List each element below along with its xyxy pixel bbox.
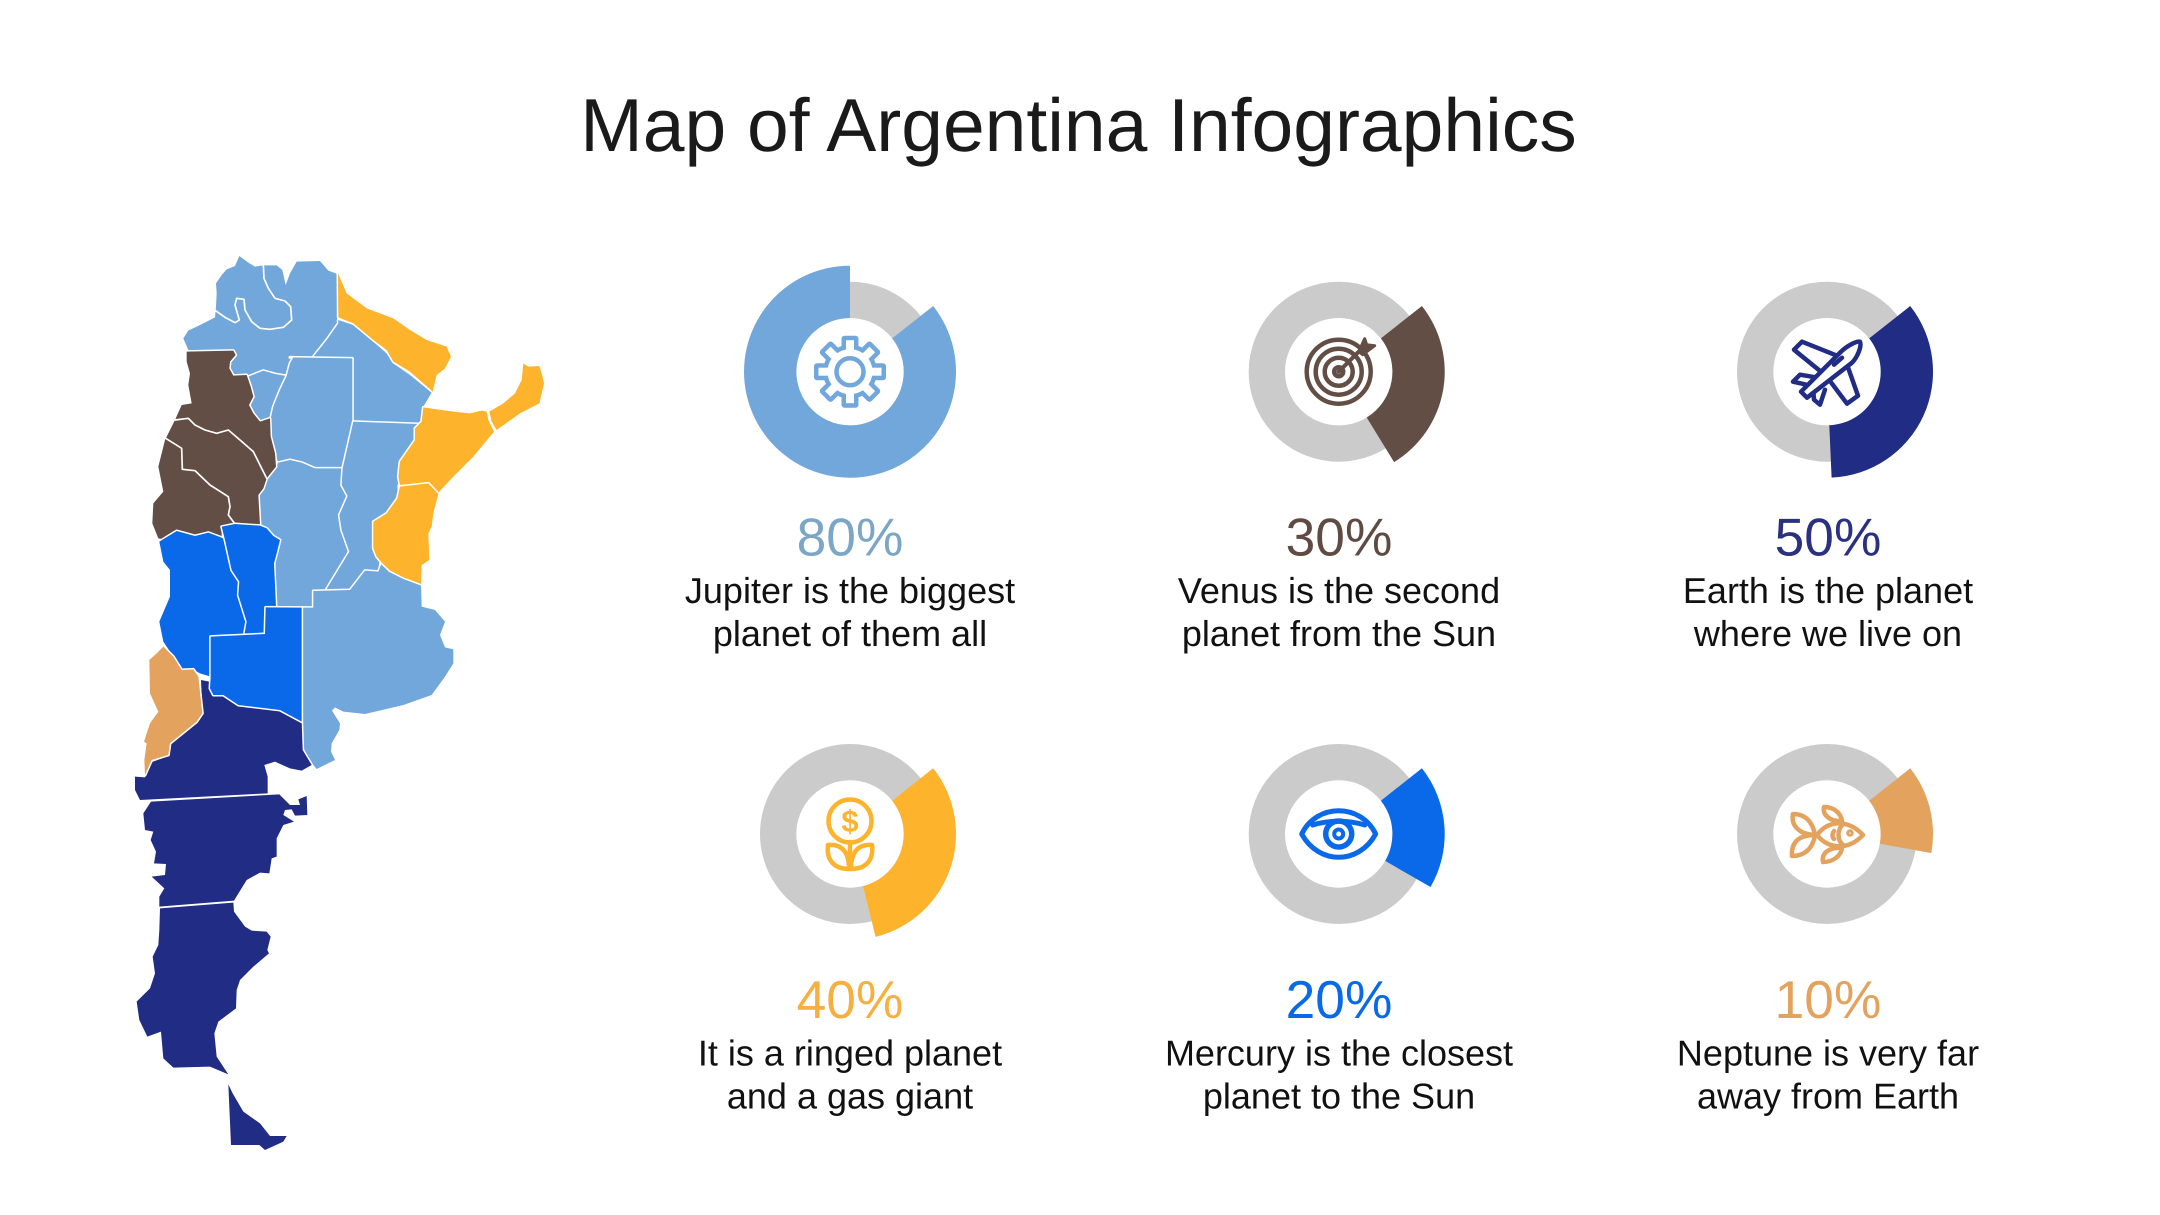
icon: target bbox=[1307, 339, 1375, 404]
description: Venus is the second bbox=[1178, 570, 1500, 611]
region: navy Patagonia south bbox=[137, 794, 307, 1150]
percentage: 10% bbox=[1775, 971, 1881, 1030]
donut chart 10% bbox=[1755, 762, 1933, 906]
description: Neptune is very far bbox=[1677, 1032, 1979, 1074]
donut chart 80% bbox=[744, 266, 956, 478]
percentage: 20% bbox=[1286, 971, 1392, 1030]
region: amber provinces bbox=[338, 273, 544, 584]
percentage: 40% bbox=[797, 971, 903, 1030]
percentage: 30% bbox=[1286, 508, 1392, 568]
panel: Jupiter 80% bbox=[685, 266, 1015, 654]
icon: airplane bbox=[1793, 342, 1860, 405]
percentage: 50% bbox=[1775, 508, 1881, 568]
description: and a gas giant bbox=[727, 1076, 973, 1116]
description: planet of them all bbox=[713, 613, 987, 654]
icon: money flower bbox=[828, 800, 872, 869]
panel: Earth 50% bbox=[1683, 300, 1973, 654]
description: It is a ringed planet bbox=[698, 1032, 1002, 1074]
title: Map of Argentina Infographics bbox=[580, 83, 1577, 167]
donut chart 50% bbox=[1755, 300, 1933, 478]
region: navy Patagonia north bbox=[135, 680, 312, 800]
percentage: 80% bbox=[797, 508, 903, 568]
region: bright blue provinces bbox=[159, 524, 302, 722]
region: brown provinces bbox=[152, 351, 276, 540]
icon: money flower: $ bbox=[841, 804, 859, 839]
region: northern light blue provinces bbox=[183, 256, 453, 769]
description: planet to the Sun bbox=[1203, 1076, 1475, 1116]
icon: gear bbox=[814, 336, 886, 408]
panel: Neptune 10% bbox=[1677, 762, 1979, 1116]
description: Mercury is the closest bbox=[1165, 1032, 1513, 1074]
donut chart 30% bbox=[1267, 300, 1445, 462]
panel: Mercury 20% bbox=[1165, 762, 1513, 1116]
region: tan province bbox=[144, 647, 202, 775]
icon: fish bbox=[1792, 807, 1863, 862]
donut chart 40% bbox=[778, 762, 956, 937]
description: planet from the Sun bbox=[1182, 613, 1496, 654]
map of Argentina bbox=[135, 256, 544, 1150]
description: Jupiter is the biggest bbox=[685, 570, 1015, 611]
icon: eye bbox=[1302, 811, 1376, 857]
description: Earth is the planet bbox=[1683, 570, 1973, 611]
panel: Saturn 40% bbox=[698, 762, 1002, 1116]
description: away from Earth bbox=[1697, 1076, 1959, 1116]
donut chart 20% bbox=[1267, 762, 1445, 906]
description: where we live on bbox=[1693, 613, 1962, 654]
panel: Venus 30% bbox=[1178, 300, 1500, 654]
